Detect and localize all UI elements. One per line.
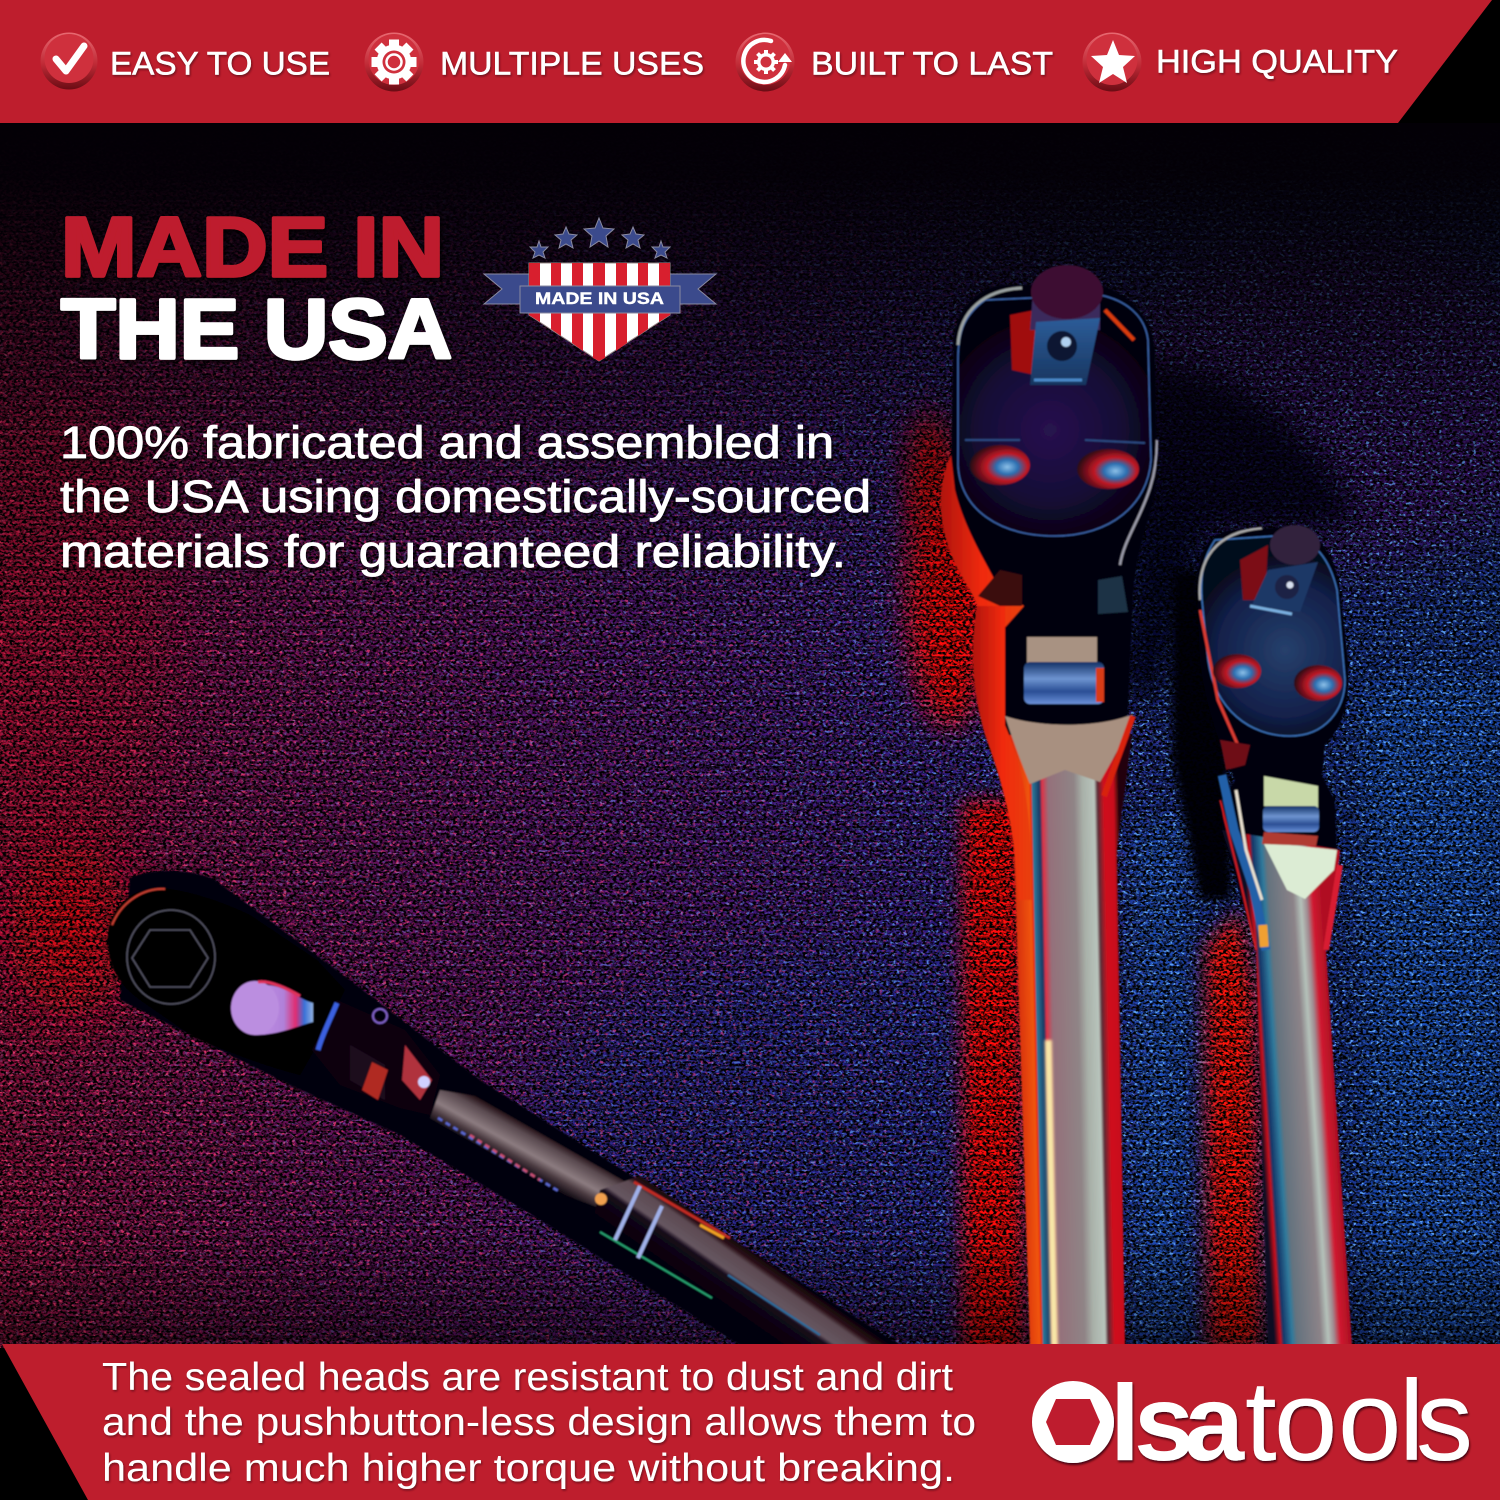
- body text: fabrication claim: [60, 417, 871, 577]
- wrench body silhouette: [951, 285, 1157, 1345]
- label: MULTIPLE USES: [440, 46, 704, 82]
- body text: fabrication claim: the USA using domestically-sourced: [60, 471, 871, 522]
- shaft: [1222, 830, 1353, 1344]
- neck knuckles: [978, 570, 1128, 614]
- feature: easy to use: [40, 32, 330, 90]
- caption text: The sealed heads are resistant to dust and dirt: [102, 1356, 953, 1399]
- head plate: [958, 295, 1151, 536]
- striped shield: [529, 263, 670, 361]
- bottom banner: [2, 1344, 1500, 1500]
- label: EASY TO USE: [110, 46, 330, 82]
- body text: fabrication claim: 100% fabricated and assembled in: [60, 417, 834, 468]
- wrench body silhouette: [1197, 527, 1352, 1345]
- feature: built to last: [736, 32, 1053, 92]
- reversing knob: [231, 981, 313, 1035]
- badge text: MADE IN USA: [535, 289, 664, 308]
- caption text: and the pushbutton-less design allows them to: [102, 1401, 976, 1444]
- yoke and roller: [1220, 740, 1319, 846]
- plate screw holes: [1213, 654, 1342, 701]
- drive stud: [1010, 265, 1134, 385]
- small ratchet wrench: [1197, 524, 1353, 1344]
- feature: multiple uses: [364, 32, 704, 92]
- hex socket: [127, 910, 215, 1004]
- drive stud: [1240, 525, 1320, 614]
- heading: made in the USA: MADE IN: [61, 200, 444, 294]
- heading: made in the USA: [61, 200, 452, 376]
- large ratchet wrench: [941, 265, 1157, 1347]
- ratchet shadow and shaft: [120, 871, 900, 1345]
- feature: high quality: [1082, 32, 1398, 92]
- yoke and roller: [1024, 637, 1104, 704]
- label: BUILT TO LAST: [811, 46, 1053, 82]
- shaft shoulder: [1005, 714, 1133, 784]
- ratchet head: [108, 888, 345, 1075]
- icon: rotating gear button: [736, 32, 794, 92]
- shoulder white V highlight: [1263, 842, 1337, 899]
- body text: fabrication claim: materials for guaranteed reliability.: [60, 526, 846, 577]
- label: HIGH QUALITY: [1156, 44, 1398, 80]
- plate screw holes: [965, 440, 1145, 489]
- top banner: [0, 0, 1492, 123]
- left red flank: [941, 455, 1024, 650]
- banner red band: [2, 1344, 1500, 1500]
- banner red band: [0, 0, 1492, 123]
- head plate: [1202, 535, 1345, 736]
- ratchet yoke: [312, 1000, 440, 1115]
- icon: gear button: [364, 32, 424, 92]
- caption text: handle much higher torque without breaking.: [102, 1447, 955, 1490]
- ribbon tails: [484, 274, 716, 304]
- left edge reflections: [1220, 775, 1266, 950]
- badge stars: [530, 218, 670, 258]
- ratchet: diagonal lower-left wrench: [108, 871, 900, 1345]
- caption text: [102, 1356, 976, 1490]
- engraved brand on shaft: [438, 1118, 560, 1192]
- ribbon banner: [520, 286, 680, 313]
- shaft: [1008, 734, 1133, 1344]
- heading: made in the USA: THE USA: [61, 282, 452, 376]
- logo: Olsatools: Olsatools: [1031, 1358, 1473, 1485]
- badge: made in USA shield: [484, 218, 716, 361]
- icon: star button: [1082, 32, 1142, 92]
- shaft rings: [595, 1186, 662, 1258]
- icon: check mark button: [40, 32, 98, 90]
